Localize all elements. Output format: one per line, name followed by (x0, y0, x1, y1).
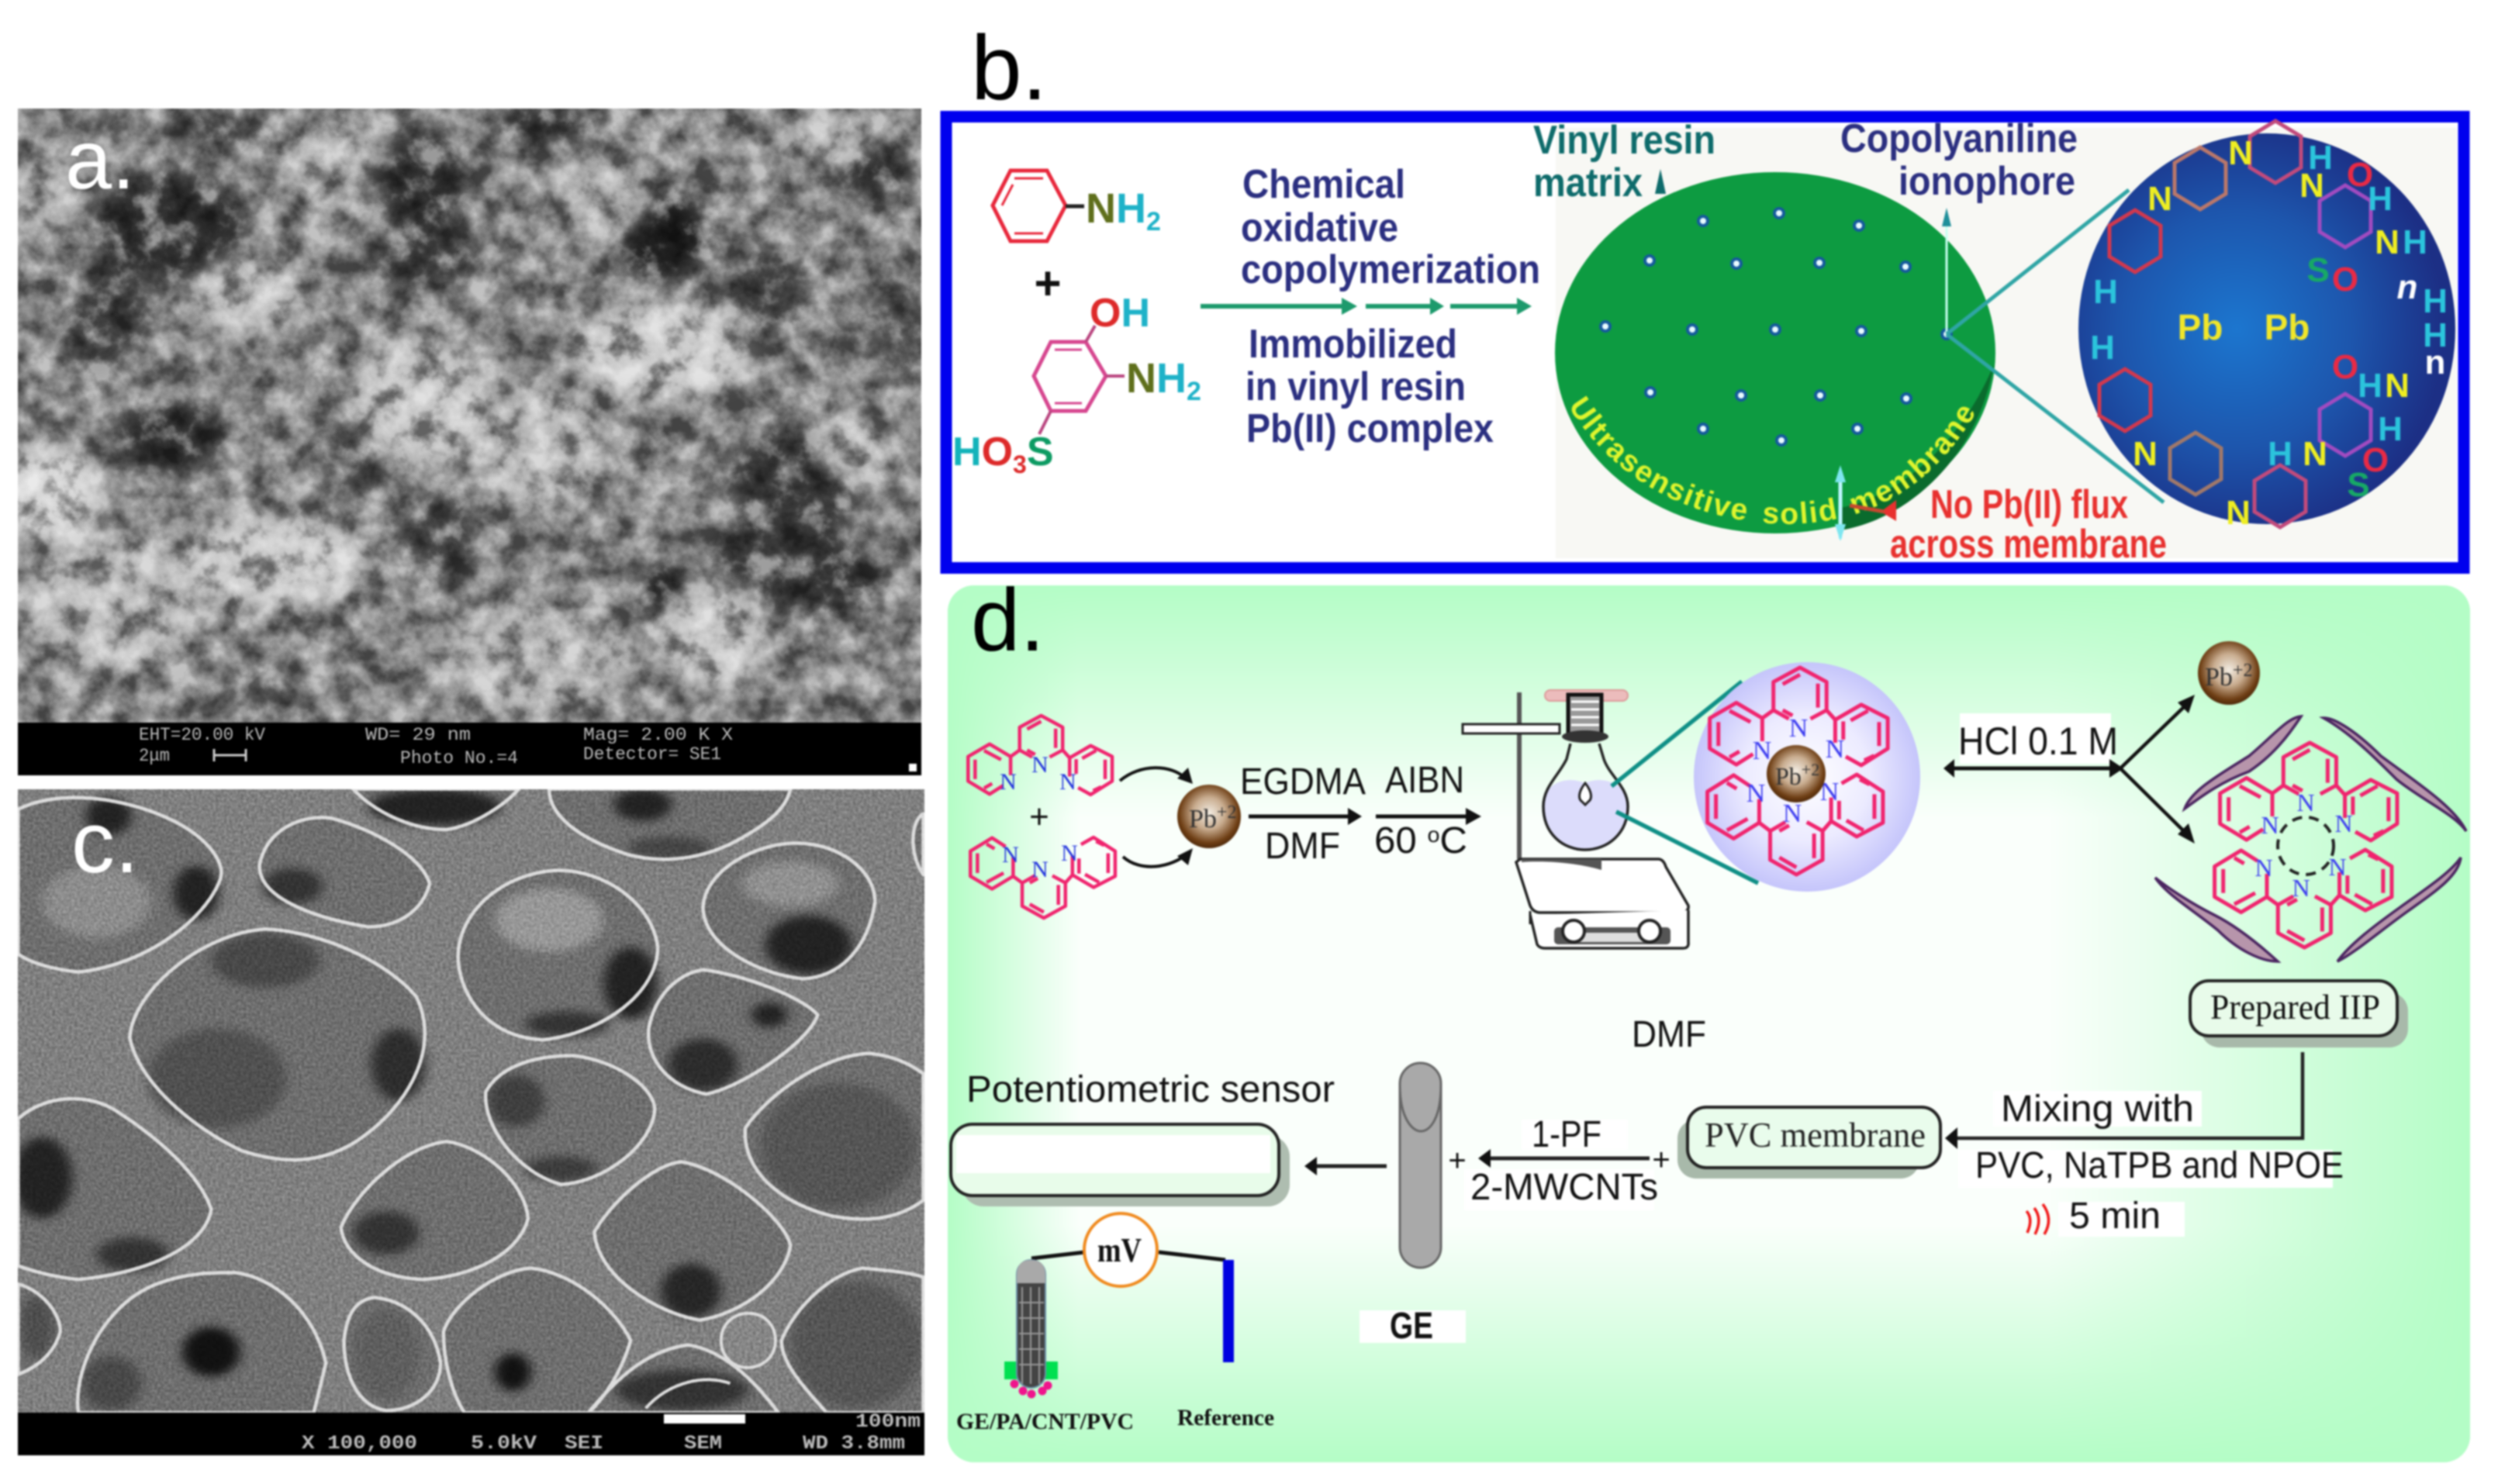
graphite electrode (1400, 1063, 1441, 1268)
arrow to sensor box (1304, 1157, 1387, 1175)
polymerisation arrows and reagents (1240, 760, 1481, 867)
reactant: aminohydroxybenzenesulfonic acid: NH (1126, 355, 1187, 402)
modification arrow: + (1652, 1143, 1671, 1177)
curved arrows to Pb ion (1120, 768, 1193, 867)
modification arrow: 1-PF (1532, 1114, 1601, 1155)
panel c: SEM micrograph of pores (12, 789, 924, 1455)
panel a: SEM micrograph (0, 105, 938, 775)
modification arrow (1448, 1114, 1671, 1210)
reactant: aminohydroxybenzenesulfonic acid: S (1027, 430, 1053, 475)
polymerisation arrows and reagents: DMF (1265, 826, 1340, 867)
magnified sphere with Pb(II) complex: O (2332, 348, 2358, 386)
label b.: b. (971, 17, 1047, 119)
magnified sphere with Pb(II) complex: Pb (2178, 307, 2223, 347)
magnified sphere with Pb(II) complex: S (2306, 251, 2330, 289)
magnified sphere with Pb(II) complex: H (2423, 282, 2448, 320)
magnified sphere with Pb(II) complex: N (2147, 180, 2172, 218)
magnified sphere with Pb(II) complex: N (2133, 435, 2158, 473)
magnified sphere with Pb(II) complex: H (2090, 329, 2115, 367)
template molecules (968, 716, 1115, 918)
label c.: c. (71, 794, 139, 891)
reaction description text: Chemical (1242, 162, 1405, 207)
imprinted Pb complex: Pb (1775, 762, 1802, 790)
magnified sphere with Pb(II) complex: N (2226, 494, 2251, 532)
template molecules: N (1000, 769, 1017, 795)
magnified sphere with Pb(II) complex: N (2299, 167, 2324, 205)
magnified sphere with Pb(II) complex: H (2368, 180, 2393, 218)
mixing arrow and conditions: PVC, NaTPB and NPOE (1975, 1145, 2344, 1186)
HCl elution arrows: HCl 0.1 M (1958, 720, 2118, 763)
copolyaniline ionophore label: Copolyaniline (1840, 116, 2078, 161)
imprinted cavity polymer: N (2296, 789, 2315, 816)
SEM info bar: EHT=20.00 kV (139, 725, 265, 745)
SEM info bar: 5.0kV (471, 1432, 537, 1455)
SEM info bar: WD 3.8mm (803, 1432, 905, 1455)
GE label (1360, 1306, 1466, 1347)
copolyaniline ionophore label (1840, 116, 2078, 334)
magnified sphere with Pb(II) complex: n (2397, 268, 2417, 306)
imprinted Pb complex: N (1826, 735, 1844, 764)
imprinted Pb complex: N (1789, 714, 1808, 743)
zoom lines to complex (1612, 682, 1758, 883)
label a.: a. (65, 112, 135, 206)
imprinted cavity polymer: N (2334, 809, 2353, 837)
reactant: aminohydroxybenzenesulfonic acid: HO (952, 430, 1013, 475)
thickness arrow and no flux callout (1835, 465, 2167, 567)
reaction description text: oxidative (1241, 205, 1398, 250)
membrane disc (1553, 171, 1997, 535)
zoom lines to sphere (1947, 190, 2164, 502)
membrane disc: Ultrasensitive solid membrane (1570, 395, 1975, 526)
Pb ion (1177, 785, 1241, 848)
imprinted cavity polymer: N (2254, 854, 2273, 882)
PVC membrane box (1677, 1107, 1940, 1179)
template molecules: N (1002, 842, 1019, 868)
modification arrow: 2-MWCNTs (1470, 1167, 1658, 1208)
reaction description text: copolymerization (1241, 247, 1540, 292)
reactant: aniline: NH (1086, 185, 1146, 232)
released Pb ion (2198, 641, 2260, 705)
thickness arrow and no flux callout: across membrane (1890, 522, 2167, 567)
magnified sphere with Pb(II) complex: N (2375, 223, 2400, 261)
vinyl resin matrix label (1533, 118, 1715, 205)
label d.: d. (971, 571, 1045, 670)
vinyl resin matrix label: Vinyl resin (1533, 118, 1715, 163)
reactant: aminohydroxybenzenesulfonic acid: 2 (1187, 377, 1201, 406)
GE label: GE (1390, 1306, 1433, 1347)
magnified sphere with Pb(II) complex: N (2303, 435, 2327, 473)
blue frame (946, 116, 2464, 568)
HCl elution arrows (1943, 695, 2195, 844)
mixing arrow and conditions: Mixing with (2001, 1089, 2194, 1130)
imprinted Pb complex: N (1820, 778, 1839, 806)
SEM info bar: Detector= SE1 (583, 744, 721, 764)
reaction description text: in vinyl resin (1246, 364, 1466, 409)
magnified sphere with Pb(II) complex: N (2385, 367, 2410, 405)
magnified sphere with Pb(II) complex: Pb (2265, 307, 2310, 347)
SEM info bar: 2μm (139, 746, 170, 766)
magnified sphere with Pb(II) complex: O (2347, 156, 2373, 194)
imprinted Pb complex: N (1783, 799, 1802, 828)
SEM info bar: SEM (684, 1432, 722, 1455)
panel b: copolyaniline ionophore membrane (938, 109, 2471, 575)
imprinted Pb complex: +2 (1802, 760, 1819, 779)
ionophore sites (1601, 209, 1951, 445)
reactant: aminohydroxybenzenesulfonic acid: OH (1090, 291, 1150, 336)
imprinted Pb complex: N (1753, 737, 1771, 765)
flask on stirrer hotplate (1463, 690, 1688, 948)
SEM info bar: Mag= 2.00 K X (583, 725, 733, 745)
Pb ion: Pb (1189, 805, 1217, 833)
reactant: aminohydroxybenzenesulfonic acid: 3 (1013, 450, 1027, 478)
gradient background (948, 585, 2470, 1462)
plus sign: + (1034, 257, 1062, 309)
potentiometric cell: mV (1097, 1231, 1142, 1269)
magnified sphere with Pb(II) complex: O (2362, 441, 2389, 479)
vinyl resin matrix label: matrix (1533, 160, 1643, 205)
magnified sphere with Pb(II) complex: H (2093, 273, 2118, 311)
magnified sphere with Pb(II) complex: H (2268, 435, 2292, 473)
imprinted cavity polymer (2155, 716, 2466, 961)
SEM info bar (18, 723, 921, 775)
panel d: sensor fabrication scheme (948, 571, 2470, 1462)
potentiometric cell (956, 1213, 1274, 1434)
SEM info bar: 100nm (855, 1410, 921, 1433)
PVC membrane box: PVC membrane (1705, 1115, 1926, 1154)
SEM info bar: X 100,000 (302, 1432, 417, 1455)
green reaction arrows (1201, 298, 1532, 315)
imprinted Pb complex (1694, 662, 1920, 892)
Prepared IIP box: Prepared IIP (2210, 987, 2380, 1027)
template molecules: N (1031, 857, 1049, 882)
modification arrow: + (1448, 1144, 1467, 1178)
reactant: aniline (993, 171, 1161, 241)
reactant: aniline: 2 (1146, 207, 1161, 236)
template molecules: + (1029, 798, 1049, 836)
template molecules: N (1059, 769, 1076, 795)
porous membrane surface (12, 789, 924, 1413)
SEM info bar: WD= 29 nm (365, 725, 471, 745)
polymerisation arrows and reagents: o (1427, 823, 1439, 847)
potentiometric cell: GE/PA/CNT/PVC (956, 1409, 1134, 1434)
magnified sphere with Pb(II) complex: O (2332, 261, 2358, 299)
imprinted cavity polymer: N (2328, 853, 2347, 881)
reaction description text: Immobilized (1249, 322, 1457, 367)
magnified sphere with Pb(II) complex: H (2308, 139, 2333, 177)
mixing arrow and conditions: 5 min (2069, 1196, 2161, 1237)
imprinted cavity polymer: N (2261, 811, 2279, 839)
magnified sphere with Pb(II) complex: H (2378, 410, 2403, 448)
magnified sphere with Pb(II) complex: H (2423, 316, 2448, 354)
template molecules: N (1061, 840, 1078, 866)
polymerisation arrows and reagents: 60 (1374, 820, 1415, 861)
released Pb ion: +2 (2233, 661, 2252, 681)
SEM info bar: SEI (565, 1432, 603, 1455)
thickness arrow and no flux callout: No Pb(II) flux (1930, 482, 2128, 527)
copolyaniline ionophore label: ionophore (1899, 159, 2075, 204)
floating DMF label: DMF (1632, 1014, 1706, 1055)
reaction description text: Pb(II) complex (1246, 406, 1494, 451)
magnified sphere with Pb(II) complex: N (2228, 134, 2253, 172)
mixing arrow and conditions (1945, 1052, 2344, 1237)
reaction description text (1241, 162, 1540, 451)
polymerisation arrows and reagents: EGDMA (1240, 761, 1366, 802)
imprinted cavity polymer: N (2292, 874, 2310, 902)
rough SEM surface texture (0, 105, 938, 723)
magnified sphere with Pb(II) complex: H (2403, 223, 2427, 261)
template molecules: N (1031, 752, 1049, 778)
SEM info bar (18, 1410, 924, 1455)
Prepared IIP box (2190, 981, 2408, 1047)
pale background behind disc (1556, 128, 2457, 558)
reactant: aminohydroxybenzenesulfonic acid (952, 291, 1201, 478)
released Pb ion: Pb (2205, 663, 2233, 692)
magnified sphere with Pb(II) complex: H (2358, 367, 2382, 405)
potentiometric sensor heading: Potentiometric sensor (966, 1069, 1335, 1110)
imprinted Pb complex: N (1747, 779, 1765, 808)
ultrasound symbol (2026, 1204, 2049, 1234)
magnified sphere with Pb(II) complex (2078, 121, 2455, 532)
SEM info bar: Photo No.=4 (400, 748, 518, 768)
potentiometric cell: Reference (1177, 1405, 1274, 1431)
magnified sphere with Pb(II) complex: S (2347, 466, 2370, 504)
polymerisation arrows and reagents: C (1439, 820, 1467, 861)
polymerisation arrows and reagents: AIBN (1385, 760, 1464, 801)
empty sensor box (951, 1124, 1290, 1206)
magnified sphere with Pb(II) complex: n (2425, 343, 2445, 381)
Pb ion: +2 (1217, 802, 1236, 823)
